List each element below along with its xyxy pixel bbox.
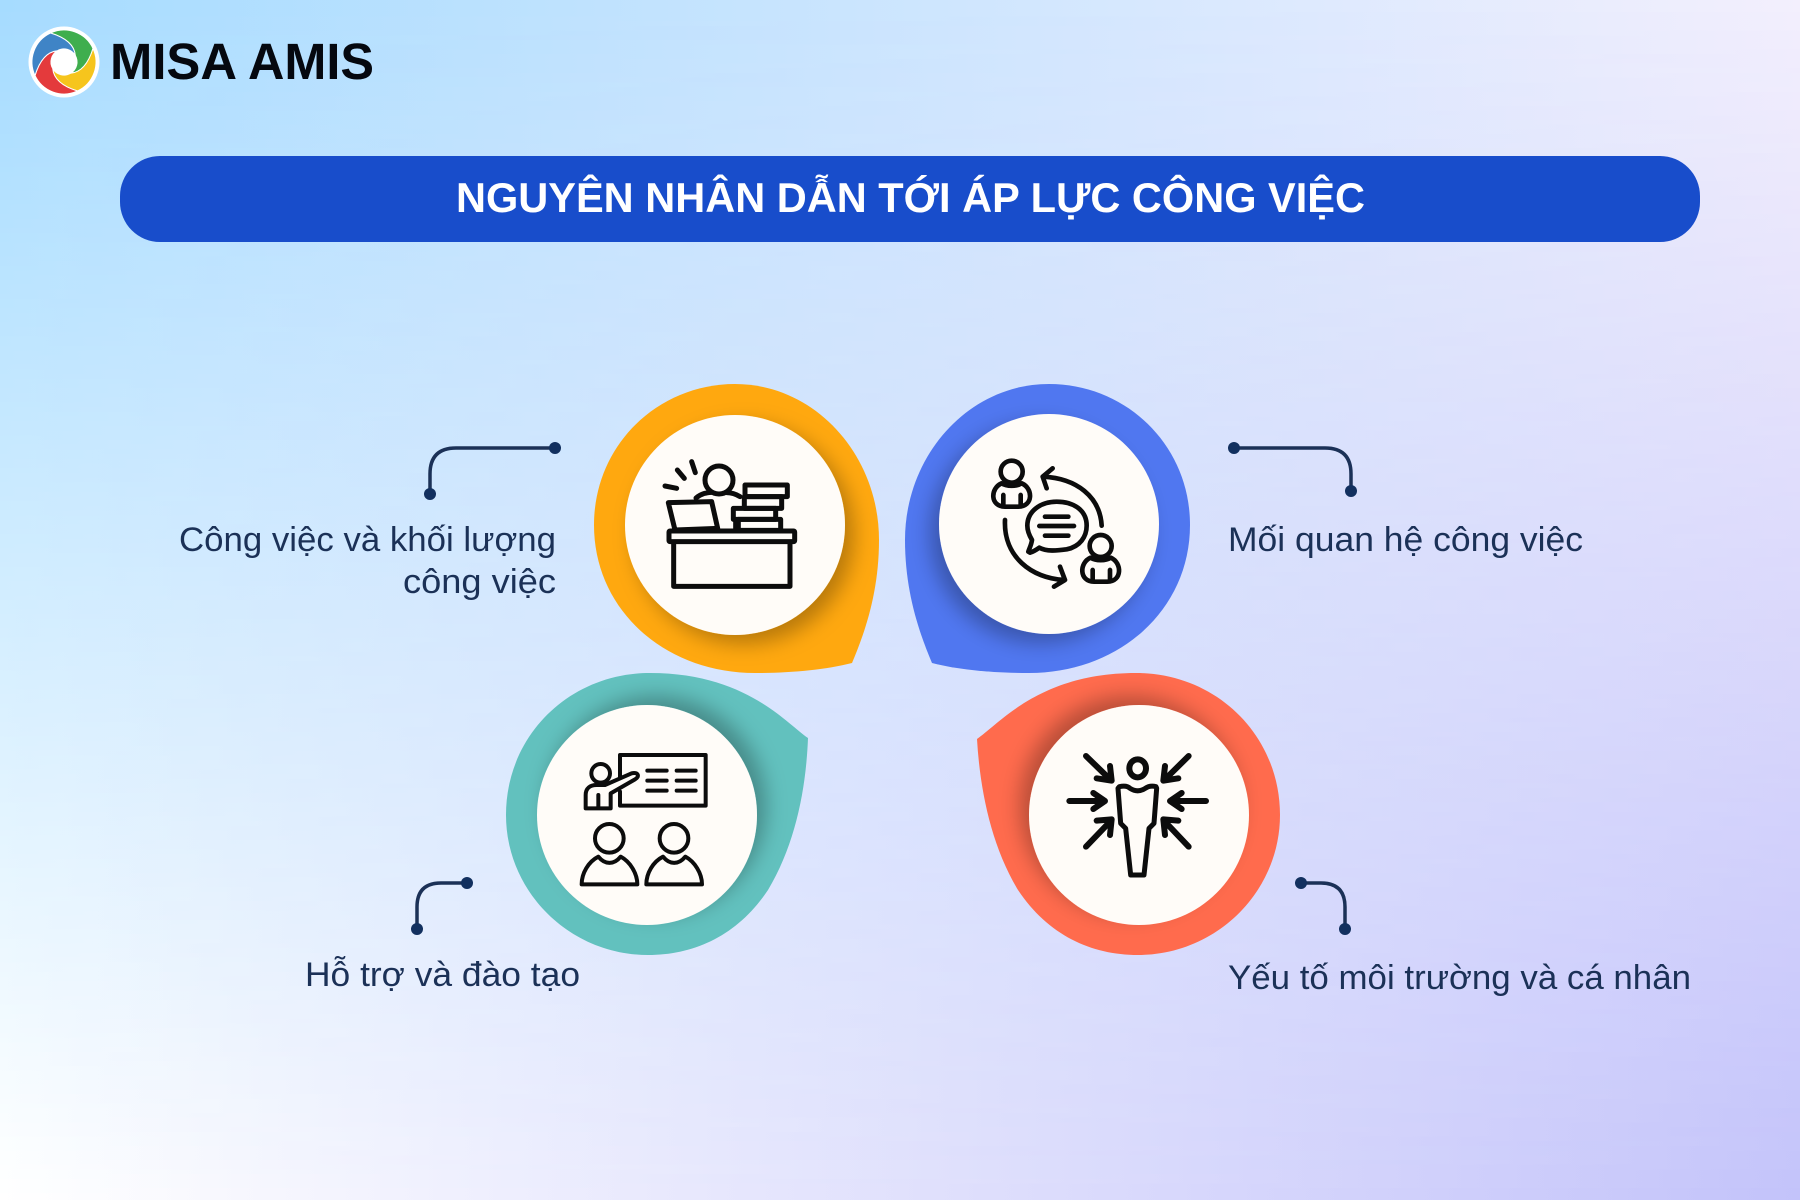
connector	[411, 877, 473, 935]
red teardrop	[977, 673, 1280, 955]
panel: support and training (teal)	[506, 673, 808, 955]
connector	[1228, 442, 1357, 497]
callout: work relationships	[1228, 442, 1583, 559]
callout: support and training	[305, 877, 580, 994]
teal teardrop	[506, 673, 808, 955]
callout: work and workload	[179, 442, 561, 601]
label text: Yếu tố môi trường và cá nhân	[1228, 959, 1691, 997]
white circle	[537, 705, 757, 925]
logo wordmark: MISA	[110, 33, 237, 90]
white circle	[1029, 705, 1249, 925]
white circle	[625, 415, 845, 635]
icon: overloaded worker at desk	[665, 462, 795, 586]
label text: công việc	[403, 563, 556, 601]
orange teardrop	[594, 384, 879, 673]
title text: NGUYÊN NHÂN DẪN TỚI ÁP LỰC CÔNG VIỆC	[456, 173, 1365, 221]
connector	[424, 442, 561, 500]
icon: two people in conversation	[993, 461, 1119, 587]
label text: Công việc và khối lượng	[179, 521, 556, 559]
connector	[1295, 877, 1351, 935]
icon: trainer with students	[582, 755, 706, 884]
icon: person under pressure from all sides	[1069, 756, 1206, 875]
title banner	[120, 156, 1700, 242]
callout: environment and personal factors	[1228, 877, 1691, 997]
label text: Hỗ trợ và đào tạo	[305, 956, 580, 994]
panel: workload (orange)	[594, 384, 879, 673]
panel: work relationships (blue)	[905, 384, 1190, 673]
logo: MISA AMIS	[28, 26, 374, 98]
panel: environment and personal factors (red)	[977, 673, 1280, 955]
label text: Mối quan hệ công việc	[1228, 521, 1583, 559]
blue teardrop	[905, 384, 1190, 673]
logo icon: swirl	[28, 26, 100, 98]
logo wordmark: AMIS	[248, 33, 374, 90]
white circle	[939, 414, 1159, 634]
